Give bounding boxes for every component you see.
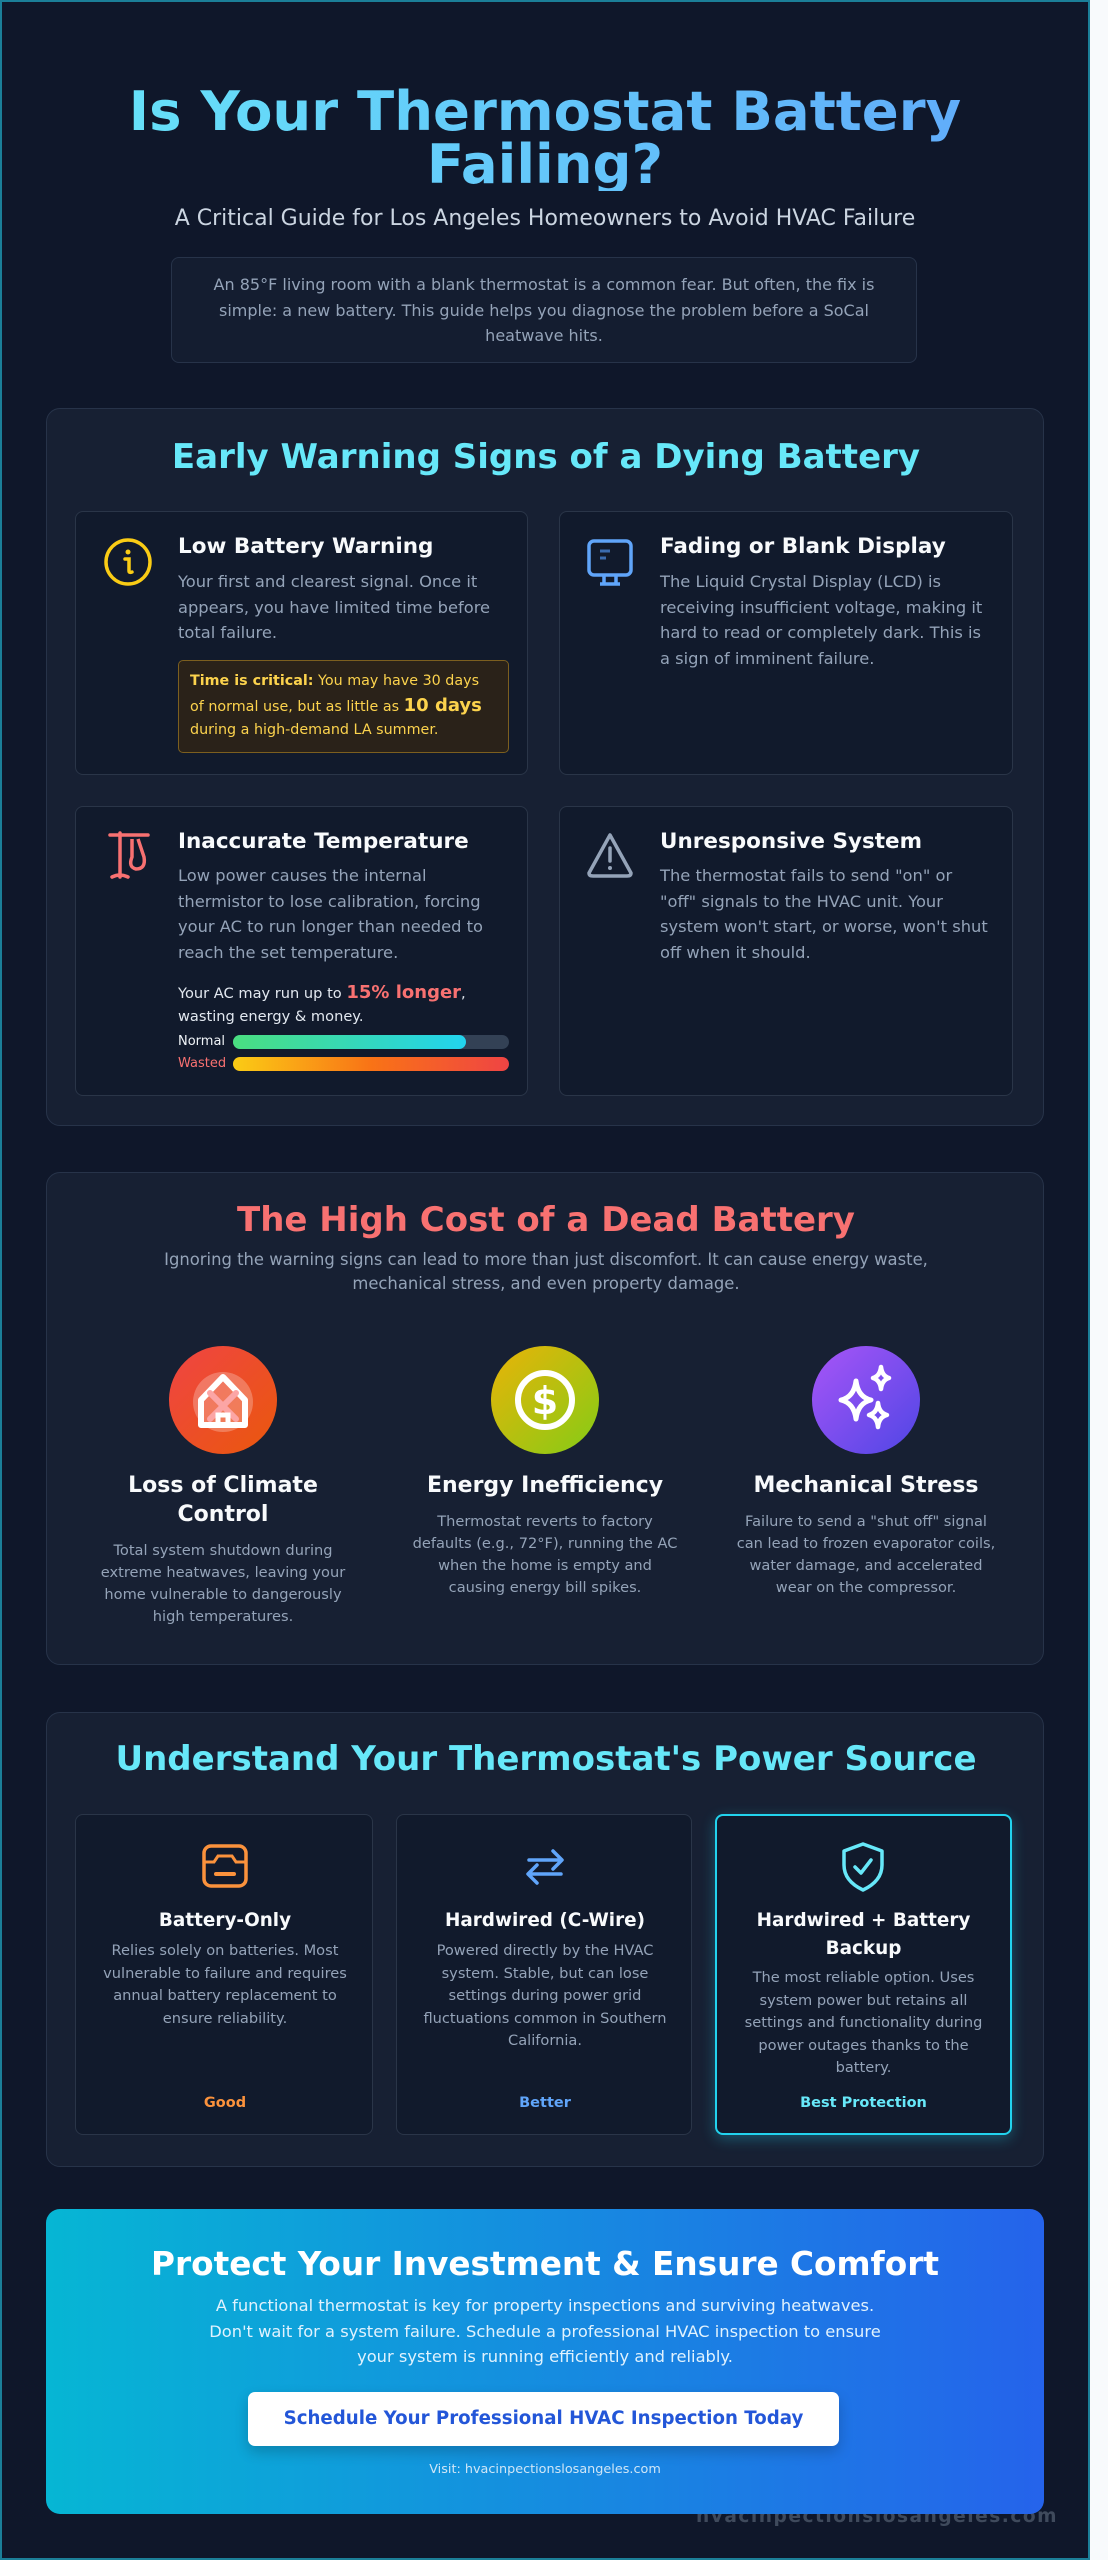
text: inaccurate: Low power causes the internal <box>178 866 427 885</box>
heading: fading: Fading or Blank Display <box>660 534 946 559</box>
text: fading: hard to read or completely dark. This is <box>660 623 981 642</box>
text: hardwired: fluctuations common in Southern <box>423 2010 667 2026</box>
text: hardwired + battery: The most reliable option. Uses <box>753 1969 974 1986</box>
text: hardwired + battery: battery. <box>836 2059 891 2076</box>
icon: thermometer <box>108 831 150 879</box>
text: unresponsive: system won't start, or worse, won't shut <box>660 917 988 936</box>
heading: mechanical: Mechanical Stress <box>754 1473 978 1498</box>
icon: info circle <box>104 538 152 586</box>
chart: normal vs wasted <box>178 1034 509 1071</box>
icon: house <box>169 1346 277 1454</box>
intro box: An 85°F living room with a blank thermostat is a common fear. But often, the fix is <box>214 275 874 294</box>
text: energy: defaults (e.g., 72°F), running the AC <box>413 1535 677 1552</box>
card: fading display <box>559 511 1013 775</box>
heading: loss: Loss of Climate <box>128 1473 318 1498</box>
item: energy inefficiency <box>413 1346 677 1596</box>
icon: sparkles <box>812 1346 920 1454</box>
card: battery-only <box>75 1814 373 2135</box>
text: visit: Visit: hvacinpectionslosangeles.com <box>429 2462 661 2477</box>
title: Failing? <box>427 132 663 196</box>
text: loss: extreme heatwaves, leaving your <box>101 1564 345 1581</box>
heading: loss: Control <box>178 1502 268 1527</box>
panel: power source <box>46 1712 1044 2167</box>
title: Is Your Thermostat Battery <box>129 79 961 143</box>
text: 15% longer: wasting energy & money. <box>178 1008 364 1024</box>
text: loss: Total system shutdown during <box>113 1542 333 1559</box>
bar: wasted <box>233 1057 509 1071</box>
text: inaccurate: thermistor to lose calibration, forcing <box>178 892 481 910</box>
text: unresponsive: "off" signals to the HVAC unit. Your <box>660 892 943 910</box>
text: mechanical <box>737 1513 995 1596</box>
bar: normal <box>233 1035 509 1049</box>
text: fading: The Liquid Crystal Display (LCD) is <box>660 572 941 591</box>
icon: arrows <box>526 1849 564 1885</box>
callout: time is critical <box>178 660 509 753</box>
text: hardwired + battery <box>745 1969 982 2076</box>
watermark: hvacinpectionslosangeles.com <box>696 2506 1058 2527</box>
text: mechanical: Failure to send a "shut off" signal <box>745 1513 987 1530</box>
callout: time is critical: during a high-demand LA summer. <box>190 722 438 738</box>
text: fading <box>660 572 982 668</box>
text: hardwired: California. <box>508 2032 582 2049</box>
intro box: heatwave hits. <box>485 326 603 345</box>
button <box>248 2392 839 2446</box>
text: loss: high temperatures. <box>153 1608 293 1625</box>
text: loss <box>101 1542 346 1625</box>
card: unresponsive system <box>559 806 1013 1096</box>
heading: low battery: Low Battery Warning <box>178 534 433 559</box>
heading: hardwired: Hardwired (C-Wire) <box>445 1910 645 1931</box>
text: fading: a sign of imminent failure. <box>660 648 874 668</box>
text: mechanical: water damage, and accelerated <box>749 1557 983 1574</box>
text: low battery: appears, you have limited time before <box>178 598 490 616</box>
text: low battery <box>178 572 490 642</box>
heading: power source: Understand Your Thermostat's Power Source <box>115 1739 977 1779</box>
title <box>0 85 1090 191</box>
label: good: Good <box>204 2095 246 2111</box>
icon: shield <box>842 1842 884 1892</box>
panel: high cost <box>46 1172 1044 1665</box>
text: battery-only: vulnerable to failure and requires <box>103 1964 347 1982</box>
callout: time is critical: Time is critical: You may have 30 days <box>190 673 479 689</box>
intro box <box>171 257 917 363</box>
text: cta <box>209 2296 881 2366</box>
text: hardwired + battery: system power but retains all <box>760 1992 967 2008</box>
label: better: Better <box>519 2095 571 2111</box>
text: high cost intro: Ignoring the warning signs can lead to more than just discomfort. It can cause energy waste, <box>164 1250 928 1269</box>
text: low battery: total failure. <box>178 623 277 642</box>
heading: inaccurate: Inaccurate Temperature <box>178 829 469 854</box>
callout: time is critical: of normal use, but as little as 10 days <box>190 694 482 716</box>
text: energy: when the home is empty and <box>438 1557 652 1574</box>
text: high cost intro <box>164 1250 928 1293</box>
heading: hardwired + battery: Hardwired + Battery <box>757 1910 970 1931</box>
icon: monitor <box>587 539 633 586</box>
card: hardwired + battery <box>715 1814 1012 2135</box>
text: loss: home vulnerable to dangerously <box>104 1586 342 1603</box>
text: energy: causing energy bill spikes. <box>449 1579 641 1596</box>
heading: unresponsive: Unresponsive System <box>660 829 922 854</box>
heading: hardwired + battery: Backup <box>826 1938 901 1959</box>
text: hardwired: Powered directly by the HVAC <box>437 1942 653 1959</box>
text: cta: A functional thermostat is key for property inspections and surviving heatwaves. <box>216 2296 874 2315</box>
intro box: simple: a new battery. This guide helps you diagnose the problem before a SoCal <box>219 300 869 320</box>
icon: dollar: $ <box>532 1379 558 1423</box>
text: hardwired: system. Stable, but can lose <box>442 1964 648 1982</box>
heading: high cost: The High Cost of a Dead Battery <box>237 1200 855 1240</box>
text: fading: receiving insufficient voltage, making it <box>660 598 982 616</box>
text: hardwired <box>423 1942 667 2049</box>
text: cta: your system is running efficiently and reliably. <box>357 2347 733 2366</box>
label: best protection: Best Protection <box>800 2095 927 2111</box>
heading: battery-only: Battery-Only <box>159 1910 291 1931</box>
text: inaccurate: your AC to run longer than needed to <box>178 917 483 936</box>
heading: early warning: Early Warning Signs of a Dying Battery <box>172 437 920 477</box>
text: hardwired + battery: power outages thanks to the <box>758 2036 969 2054</box>
text: battery-only: Relies solely on batteries. Most <box>112 1942 338 1959</box>
text: cta: Don't wait for a system failure. Schedule a professional HVAC inspection to ensure <box>209 2322 881 2340</box>
text: mechanical: wear on the compressor. <box>776 1579 956 1596</box>
text: high cost intro: mechanical stress, and even property damage. <box>352 1274 740 1293</box>
text: hardwired + battery: settings and functionality during <box>745 2014 982 2031</box>
text: unresponsive <box>660 866 988 962</box>
item: mechanical stress <box>737 1346 995 1596</box>
card: low battery warning <box>75 511 528 775</box>
label: wasted: Wasted <box>178 1056 226 1071</box>
text: inaccurate: reach the set temperature. <box>178 942 398 962</box>
heading: loss <box>128 1473 318 1527</box>
text: 15% longer <box>178 982 466 1024</box>
icon: battery <box>202 1844 248 1888</box>
icon: dollar <box>491 1346 599 1454</box>
text: mechanical: can lead to frozen evaporator coils, <box>737 1535 995 1552</box>
text: 15% longer: Your AC may run up to 15% longer, <box>178 982 466 1003</box>
label: normal: Normal <box>178 1034 225 1049</box>
subtitle: A Critical Guide for Los Angeles Homeowners to Avoid HVAC Failure <box>175 206 915 231</box>
card: hardwired <box>396 1814 692 2135</box>
text: unresponsive: off when it should. <box>660 942 811 962</box>
card: inaccurate temperature <box>75 806 528 1096</box>
item: loss of climate control <box>101 1346 346 1625</box>
button: Schedule Your Professional HVAC Inspection Today <box>284 2408 803 2429</box>
icon: warning triangle <box>587 833 633 878</box>
heading: energy: Energy Inefficiency <box>427 1473 663 1498</box>
text: energy <box>413 1513 677 1596</box>
panel: call to action <box>46 2209 1044 2514</box>
text: battery-only: annual battery replacement to <box>113 1987 337 2004</box>
text: inaccurate <box>178 866 483 962</box>
text: low battery: Your first and clearest signal. Once it <box>178 572 477 591</box>
heading: hardwired + battery <box>757 1910 970 1959</box>
text: energy: Thermostat reverts to factory <box>437 1513 653 1530</box>
text: battery-only: ensure reliability. <box>163 2010 287 2026</box>
text: battery-only <box>103 1942 347 2026</box>
text: unresponsive: The thermostat fails to send "on" or <box>660 866 952 885</box>
text: hardwired: settings during power grid <box>449 1987 641 2004</box>
panel: early warning signs <box>46 408 1044 1126</box>
heading: cta: Protect Your Investment & Ensure Comfort <box>151 2245 939 2283</box>
